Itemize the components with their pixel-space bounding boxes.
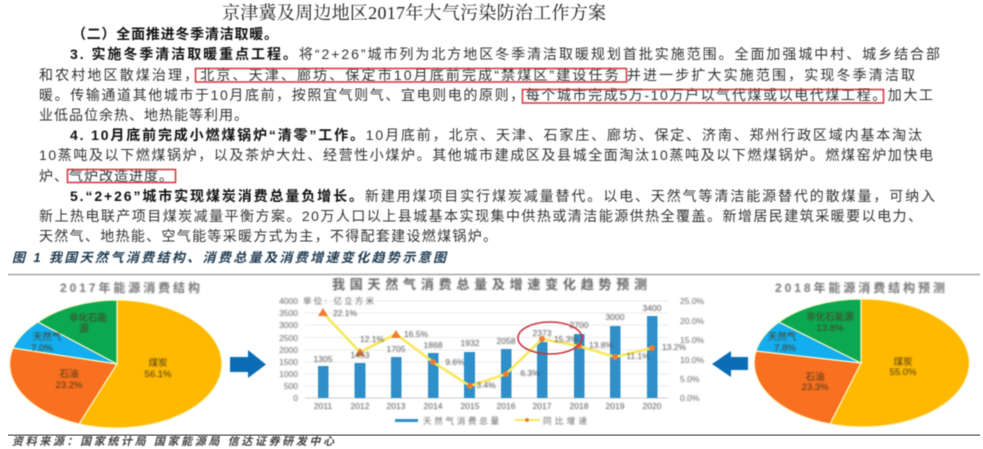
growth rate labels: 15.3% bbox=[554, 334, 578, 344]
figure top rule bbox=[8, 274, 980, 276]
paragraph 3 bbox=[39, 46, 940, 123]
pie labels 2018: 天然气 bbox=[768, 331, 797, 343]
growth rate labels: 22.1% bbox=[333, 308, 357, 318]
paragraph 5: 天然气、地热能、空气能等采暖方式为主，不得配套建设燃煤锅炉。 bbox=[39, 228, 497, 244]
pie labels 2017: 石油 bbox=[59, 368, 79, 380]
callout: red highlight boxes bbox=[68, 68, 884, 182]
bars: consumption bbox=[318, 316, 658, 398]
gridlines bbox=[305, 301, 668, 398]
year axis labels: 2012 bbox=[351, 401, 370, 411]
paragraph 5: 新上热电联产项目煤炭减量平衡方案。20万人口以上县城基本实现集中供热或清洁能源供热全覆盖。新增居民建筑采暖要以电力、 bbox=[39, 208, 922, 224]
bar value labels: 3000 bbox=[606, 312, 625, 322]
paragraph 3: 和农村地区散煤治理，北京、天津、廊坊、保定市10月底前完成“禁煤区”建设任务 并进一步扩大实施范围，实现冬季清洁取 bbox=[39, 67, 915, 83]
year axis labels: 2015 bbox=[461, 401, 480, 411]
pie labels 2018: 非化石能源 bbox=[806, 311, 854, 323]
pie labels 2017: 煤炭 bbox=[148, 357, 168, 369]
pie labels 2018: 石油 bbox=[805, 371, 825, 383]
left axis labels: 3000 bbox=[279, 320, 298, 330]
left axis labels: 3500 bbox=[279, 308, 298, 318]
growth rate labels: 11.1% bbox=[626, 351, 650, 361]
bar value labels: 3400 bbox=[643, 303, 662, 313]
line markers bbox=[318, 308, 655, 389]
growth rate labels: 16.5% bbox=[404, 329, 428, 339]
panel: natural gas consumption chart bbox=[279, 277, 705, 426]
bar value labels: 2700 bbox=[570, 320, 589, 330]
paragraph 4: 4. 10月底前完成小燃煤锅炉“清零”工作。10月底前，北京、天津、石家庄、廊坊、保定、济南、郑州行政区域内基本淘汰 bbox=[70, 127, 922, 143]
figure bottom rule bbox=[8, 434, 980, 436]
growth rate labels: 3.4% bbox=[476, 380, 496, 390]
year axis labels: 2014 bbox=[424, 401, 443, 411]
paragraph 3: 3. 实施冬季清洁取暖重点工程。将“2+26”城市列为北方地区冬季清洁取暖规划首批实施范围。全面加强城中村、城乡结合部 bbox=[70, 46, 940, 62]
unit label: 单位: 亿立方米 bbox=[303, 296, 374, 306]
growth rate labels: 12.1% bbox=[360, 334, 384, 344]
bar value labels: 1868 bbox=[424, 340, 443, 350]
bar value labels bbox=[314, 303, 662, 364]
bar value labels: 1705 bbox=[387, 344, 406, 354]
year axis labels: 2017 bbox=[533, 401, 552, 411]
legend: 同比增速 bbox=[543, 416, 587, 426]
title: 京津冀及周边地区2017年大气污染防治工作方案 bbox=[222, 2, 606, 23]
right axis labels: 10.0% bbox=[680, 355, 705, 365]
pie labels 2017: 56.1% bbox=[145, 369, 172, 380]
year axis labels: 2020 bbox=[643, 401, 662, 411]
year axis labels: 2013 bbox=[387, 401, 406, 411]
pie labels 2018: 13.8% bbox=[817, 323, 844, 334]
arrow: left pie to chart bbox=[230, 350, 266, 378]
paragraph 3: 业低品位余热、地热能等利用。 bbox=[39, 107, 248, 123]
year axis labels: 2016 bbox=[497, 401, 516, 411]
pie labels 2017 bbox=[31, 312, 172, 391]
paragraph 5: 5.“2+26”城市实现煤炭消费总量负增长。新建用煤项目实行煤炭减量替代。以电、天然气等清洁能源替代的散煤量，可纳入 bbox=[70, 188, 935, 204]
year axis labels: 2019 bbox=[606, 401, 625, 411]
right axis labels: 0.0% bbox=[680, 393, 700, 403]
line: year-on-year growth bbox=[318, 308, 655, 389]
bar value labels: 2373 bbox=[533, 328, 552, 338]
left axis labels: 4000 bbox=[279, 296, 298, 306]
pie labels 2018: 23.3% bbox=[802, 382, 829, 393]
year axis labels bbox=[314, 401, 662, 411]
growth rate labels bbox=[333, 308, 686, 390]
pie labels 2017: 非化石能 bbox=[69, 312, 107, 324]
paragraph 4: 炉、气炉改造进度。 bbox=[39, 168, 173, 184]
heading: section two: （二）全面推进冬季清洁取暖。 bbox=[72, 26, 278, 42]
panel: 2017 energy pie chart bbox=[10, 280, 222, 428]
right axis labels: 25.0% bbox=[680, 296, 705, 306]
legend bbox=[395, 416, 587, 426]
left axis labels: 2500 bbox=[279, 333, 298, 343]
left axis labels: 1500 bbox=[279, 357, 298, 367]
pie labels 2018 bbox=[768, 311, 917, 393]
figure caption: 图 1 我国天然气消费结构、消费总量及消费增速变化趋势示意图 bbox=[12, 250, 448, 265]
pie slices 2018 bbox=[754, 299, 969, 427]
year axis labels: 2011 bbox=[314, 401, 332, 411]
pie slices 2017 bbox=[10, 300, 222, 428]
paragraph 4: 10蒸吨及以下燃煤锅炉，以及茶炉大灶、经营性小煤炉。其他城市建成区及县城全面淘汰10蒸吨及以下燃煤锅炉。燃煤窑炉加快电 bbox=[39, 147, 933, 163]
paragraph 5 bbox=[39, 188, 935, 244]
panel: 2018 energy pie chart bbox=[754, 280, 969, 427]
text block: policy excerpt bbox=[39, 26, 940, 244]
right axis labels: 15.0% bbox=[680, 335, 705, 345]
bar value labels: 1453 bbox=[351, 350, 370, 360]
left axis labels: 0 bbox=[293, 393, 298, 403]
right axis labels bbox=[680, 296, 705, 403]
paragraph 4 bbox=[39, 127, 933, 184]
pie labels 2017: 7.0% bbox=[31, 343, 53, 354]
growth rate labels: 9.6% bbox=[445, 357, 465, 367]
pie labels 2018: 煤炭 bbox=[893, 356, 913, 368]
pie labels 2017: 天然气 bbox=[33, 331, 62, 343]
right axis labels: 5.0% bbox=[680, 374, 700, 384]
chart title: 我国天然气消费总量及增速变化趋势预测 bbox=[332, 277, 647, 292]
growth rate labels: 13.2% bbox=[662, 342, 686, 352]
left axis labels: 2000 bbox=[279, 345, 298, 355]
source note: 资料来源：国家统计局 国家能源局 信达证券研发中心 bbox=[12, 435, 335, 448]
pie labels 2017: 源 bbox=[79, 324, 89, 335]
bar value labels: 2058 bbox=[497, 336, 516, 346]
pie title 2017: 2017年能源消费结构 bbox=[60, 280, 200, 295]
paragraph 3: 暖。传输通道其他城市于10月底前，按照宜气则气、宜电则电的原则，每个城市完成5万-10万户以气代煤或以电代煤工程。加大工 bbox=[39, 87, 933, 103]
left axis labels: 500 bbox=[284, 381, 298, 391]
bar value labels: 1932 bbox=[461, 338, 480, 348]
pie title 2018: 2018年能源消费结构预测 bbox=[775, 280, 945, 295]
right axis labels: 20.0% bbox=[680, 316, 705, 326]
arrow: right pie to chart bbox=[712, 351, 748, 377]
pie labels 2018: 55.0% bbox=[890, 367, 917, 378]
callout: 2017 red circle bbox=[518, 322, 582, 354]
growth rate labels: 6.3% bbox=[520, 368, 540, 378]
left axis labels bbox=[279, 296, 298, 403]
legend: 天然气消费总量 bbox=[423, 416, 499, 426]
pie labels 2017: 23.2% bbox=[56, 380, 83, 391]
growth rate labels: 13.8% bbox=[589, 340, 613, 350]
bar value labels: 1305 bbox=[314, 354, 333, 364]
year axis labels: 2018 bbox=[570, 401, 589, 411]
pie labels 2018: 7.8% bbox=[774, 343, 796, 354]
left axis labels: 1000 bbox=[279, 369, 298, 379]
